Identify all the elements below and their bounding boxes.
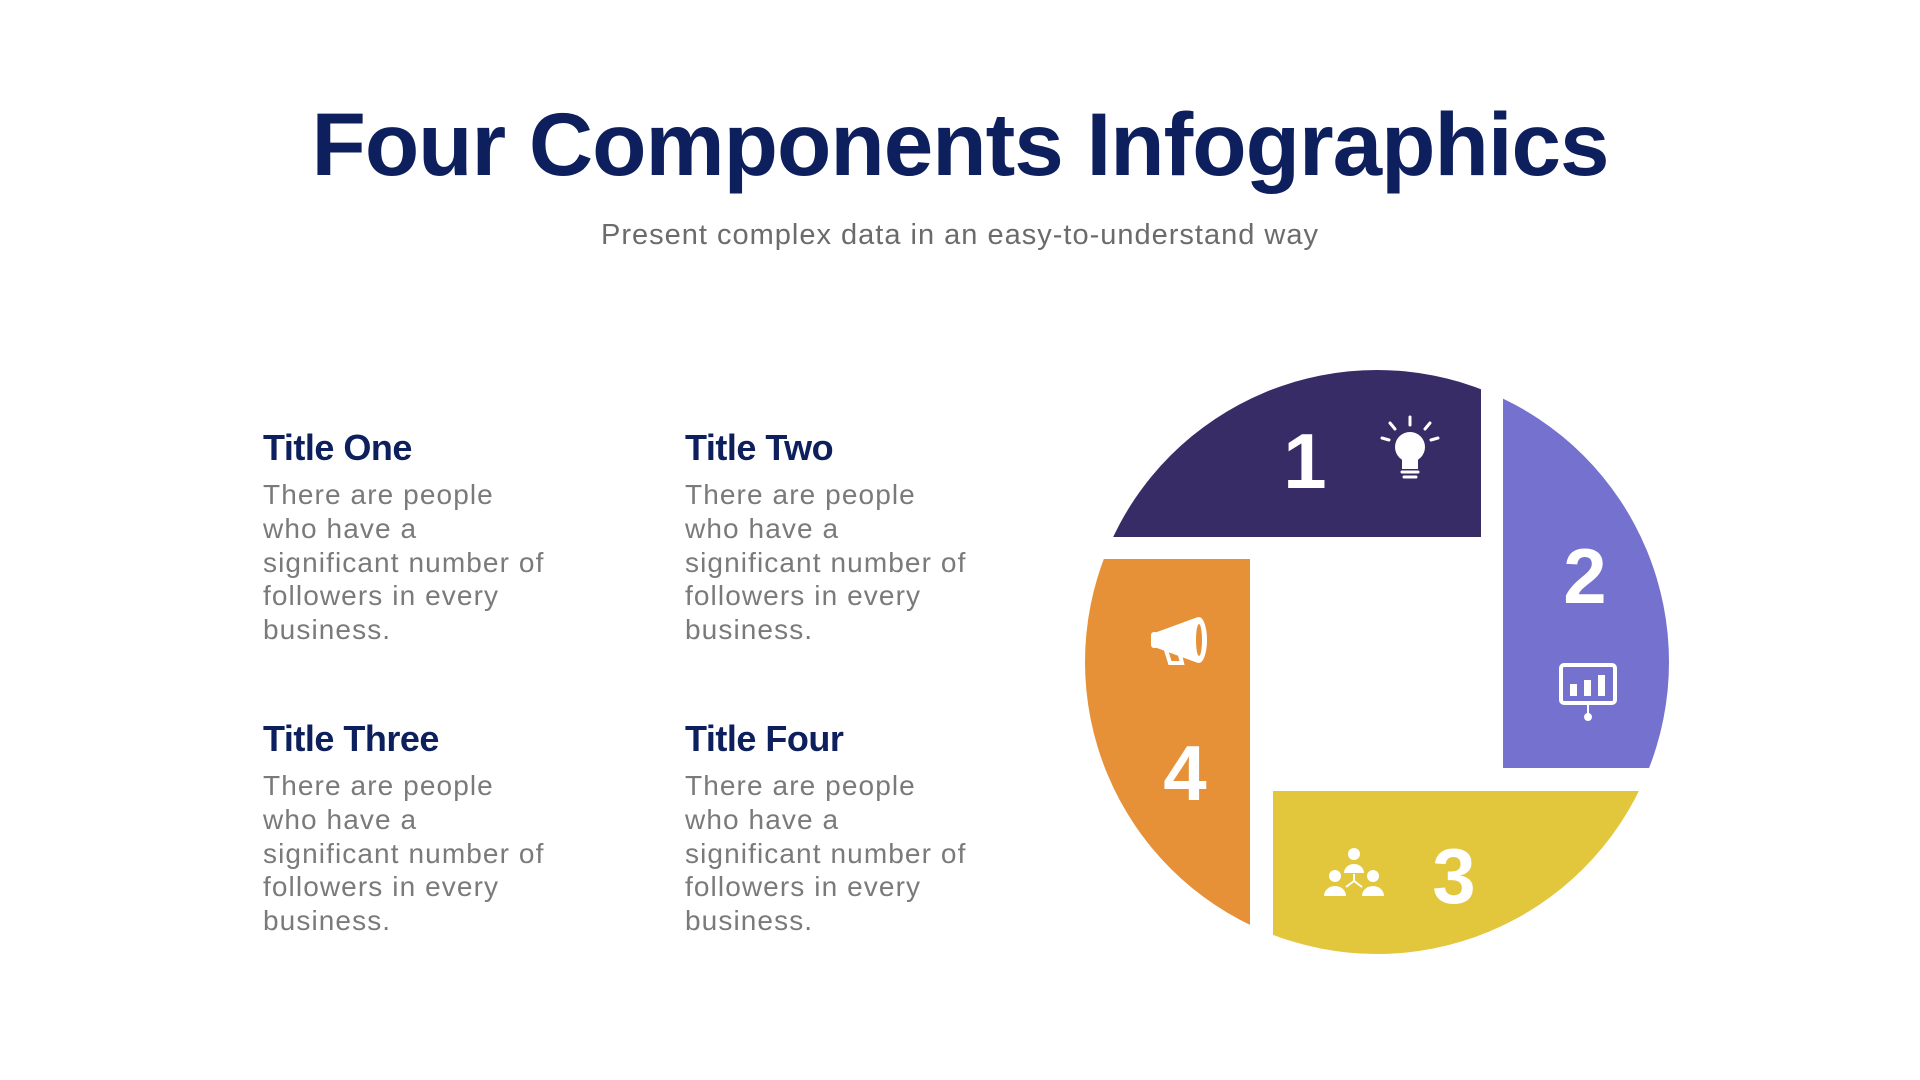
heading: title four: Title Four: [685, 718, 843, 759]
segment 1: [1113, 370, 1481, 537]
body: title two: significant number of: [685, 547, 966, 578]
body: title one: business.: [263, 614, 391, 645]
segment 3: [1273, 791, 1639, 954]
body: title four: There are people: [685, 770, 916, 801]
body: title two: who have a: [685, 513, 839, 544]
body: title four: business.: [685, 905, 813, 936]
body: title one: significant number of: [263, 547, 544, 578]
body: title four: significant number of: [685, 838, 966, 869]
body: title three: There are people: [263, 770, 494, 801]
segment 2: [1503, 398, 1669, 768]
icon: presentation chart: [1561, 665, 1615, 719]
text block: title one: [263, 427, 544, 645]
segment 1: 1: [1283, 417, 1327, 505]
heading: title one: Title One: [263, 427, 412, 468]
body: title two: [685, 479, 966, 645]
segment 4: 4: [1163, 729, 1207, 817]
text block: title four: [685, 718, 966, 936]
body: title one: followers in every: [263, 580, 499, 611]
body: title two: business.: [685, 614, 813, 645]
icon: light bulb: [1382, 417, 1438, 477]
icon: megaphone: [1151, 617, 1207, 663]
title: Four Components Infographics: [311, 94, 1609, 194]
body: title three: who have a: [263, 804, 417, 835]
body: title two: followers in every: [685, 580, 921, 611]
body: title one: [263, 479, 544, 645]
body: title three: significant number of: [263, 838, 544, 869]
body: title one: who have a: [263, 513, 417, 544]
pie chart: four components: [1085, 370, 1669, 954]
body: title two: There are people: [685, 479, 916, 510]
body: title four: followers in every: [685, 871, 921, 902]
body: title three: business.: [263, 905, 391, 936]
body: title four: who have a: [685, 804, 839, 835]
body: title one: There are people: [263, 479, 494, 510]
heading: title three: Title Three: [263, 718, 439, 759]
body: title three: followers in every: [263, 871, 499, 902]
heading: title two: Title Two: [685, 427, 833, 468]
segment 4: [1085, 559, 1250, 925]
text block: title two: [685, 427, 966, 645]
body: title four: [685, 770, 966, 936]
icon: people hierarchy: [1324, 848, 1384, 896]
segment 2: 2: [1563, 532, 1607, 620]
subtitle: Present complex data in an easy-to-understand way: [601, 219, 1319, 251]
text block: title three: [263, 718, 544, 936]
segment 3: 3: [1432, 832, 1476, 920]
body: title three: [263, 770, 544, 936]
